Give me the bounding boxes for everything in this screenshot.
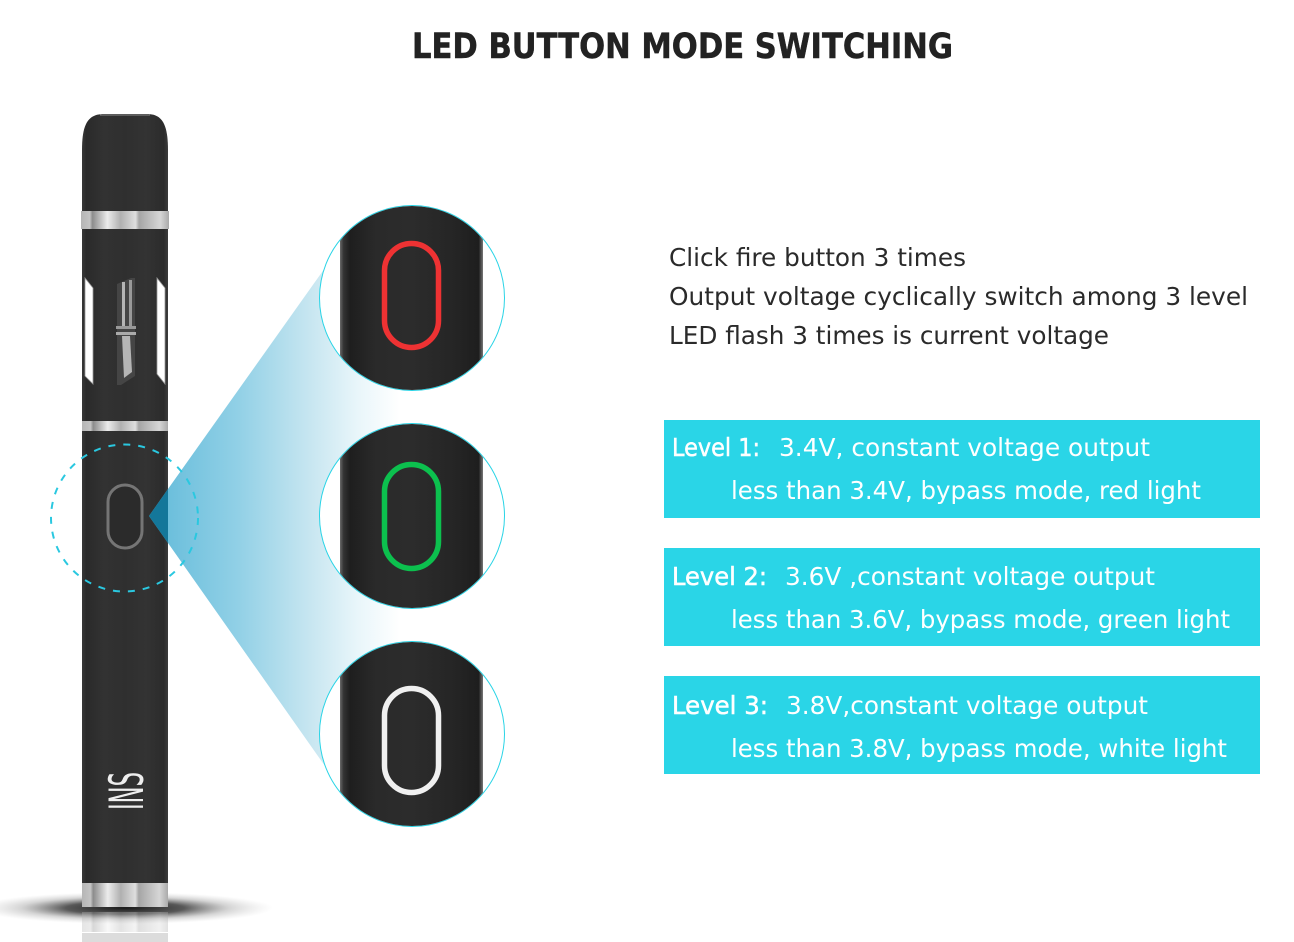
instructions text bbox=[669, 243, 1248, 350]
panel: level 3 bbox=[664, 676, 1260, 774]
panel: level 1 bbox=[664, 420, 1260, 518]
light beam bbox=[149, 258, 400, 776]
panel: level 1: 3.4V, constant voltage output bbox=[779, 433, 1150, 462]
bottom ring bbox=[82, 883, 168, 907]
beam over pen bbox=[149, 489, 168, 543]
panel: level 1: Level 1: bbox=[672, 433, 760, 462]
top ring bbox=[81, 211, 169, 229]
mouthpiece top highlight bbox=[100, 114, 150, 116]
panel: level 2: 3.6V ,constant voltage output bbox=[785, 562, 1155, 591]
instructions text: Click fire button 3 times bbox=[669, 243, 966, 272]
zoom circle: green LED bbox=[320, 418, 504, 614]
title: LED BUTTON MODE SWITCHING bbox=[412, 27, 953, 67]
dashed highlight circle bbox=[51, 444, 198, 592]
window left bbox=[85, 278, 93, 384]
pen mouthpiece and body bbox=[82, 114, 168, 884]
center window with cartridge bbox=[116, 278, 136, 385]
lower reflection bbox=[82, 933, 168, 942]
panel: level 1: less than 3.4V, bypass mode, red light bbox=[731, 476, 1201, 505]
zoom circle: white LED bbox=[320, 636, 504, 832]
instructions text: Output voltage cyclically switch among 3 level bbox=[669, 282, 1248, 311]
device: vape pen: INS bbox=[100, 772, 155, 810]
instructions text: LED flash 3 times is current voltage bbox=[669, 321, 1109, 350]
side button bbox=[108, 485, 142, 548]
window right bbox=[157, 278, 165, 384]
panel: level 2 bbox=[664, 548, 1260, 646]
device: vape pen bbox=[81, 114, 169, 942]
zoom circle: red LED bbox=[320, 200, 504, 396]
panel: level 3: Level 3: bbox=[672, 691, 768, 720]
panel: level 2: less than 3.6V, bypass mode, green light bbox=[731, 605, 1230, 634]
panel: level 3: less than 3.8V, bypass mode, white light bbox=[731, 734, 1227, 763]
floor shadow bbox=[0, 892, 273, 924]
panel: level 3: 3.8V,constant voltage output bbox=[786, 691, 1148, 720]
middle ring bbox=[82, 421, 168, 431]
ring reflection bbox=[82, 912, 168, 932]
panel: level 2: Level 2: bbox=[672, 562, 767, 591]
